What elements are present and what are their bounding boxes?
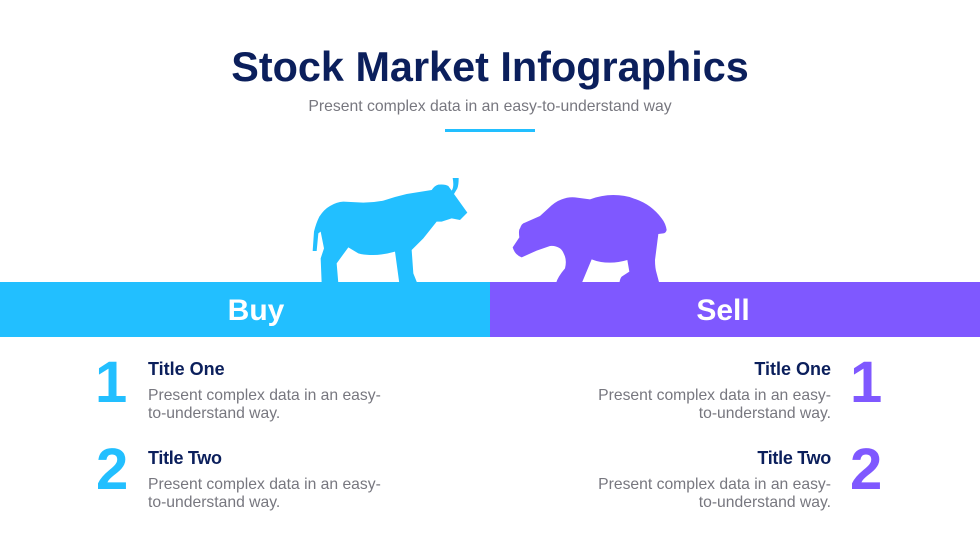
title underline bbox=[445, 129, 535, 132]
heading: sell title two: Title Two bbox=[757, 448, 831, 468]
panel: buy banner: Buy bbox=[228, 294, 284, 327]
heading: buy title one: Title One bbox=[148, 359, 225, 379]
panel: sell banner bbox=[490, 282, 980, 337]
text: buy item one: Present complex data in an easy- bbox=[148, 387, 381, 404]
text: buy item one: to-understand way. bbox=[148, 404, 280, 422]
heading: buy title two: Title Two bbox=[148, 448, 222, 468]
title: Stock Market Infographics bbox=[231, 44, 749, 90]
number: sell 1: 1 bbox=[850, 350, 882, 415]
text: sell item one: to-understand way. bbox=[699, 404, 831, 422]
heading: sell title one: Title One bbox=[754, 359, 831, 379]
icon: bull bbox=[312, 178, 468, 282]
text: buy item two: Present complex data in an easy- bbox=[148, 476, 381, 493]
number: buy 2: 2 bbox=[96, 437, 128, 502]
text: buy item one bbox=[148, 387, 381, 422]
number: sell 2: 2 bbox=[850, 437, 882, 502]
number: buy 1: 1 bbox=[95, 350, 127, 415]
panel: sell banner: Sell bbox=[696, 294, 750, 327]
text: sell item two: Present complex data in an easy- bbox=[598, 476, 831, 493]
text: sell item two bbox=[598, 476, 831, 510]
text: sell item two: to-understand way. bbox=[699, 494, 831, 510]
panel: buy banner bbox=[0, 282, 490, 337]
text: buy item two bbox=[148, 476, 381, 510]
text: buy item two: to-understand way. bbox=[148, 494, 280, 510]
subtitle: Present complex data in an easy-to-understand way bbox=[308, 98, 672, 115]
text: sell item one bbox=[598, 387, 831, 422]
icon: bear bbox=[512, 195, 667, 282]
text: sell item one: Present complex data in an easy- bbox=[598, 387, 831, 404]
